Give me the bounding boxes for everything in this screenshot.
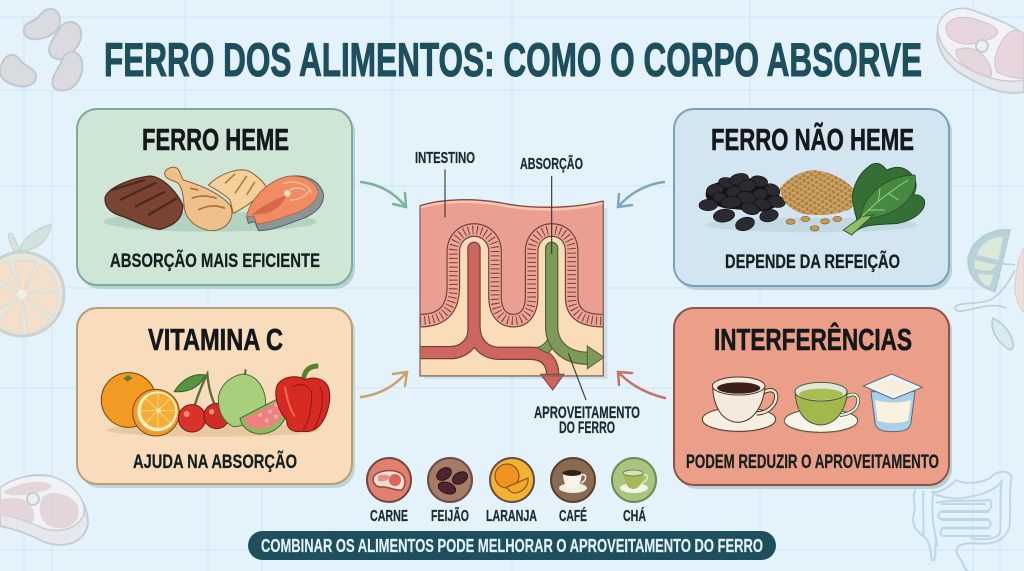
footer banner: COMBINAR OS ALIMENTOS PODE MELHORAR O APROVEITAMENTO DO FERRO bbox=[261, 535, 763, 556]
decoration: intestine bottom right bbox=[913, 472, 1012, 571]
label: absorcao: ABSORÇÃO bbox=[520, 153, 583, 173]
legend: cha bbox=[612, 458, 656, 525]
icon: fruits and pepper bbox=[101, 366, 330, 437]
label: aproveitamento do ferro bbox=[534, 404, 640, 437]
arrow: non heme to intestine bbox=[618, 182, 664, 207]
legend: cafe: CAFÉ bbox=[559, 506, 587, 525]
heading: ferro nao heme: FERRO NÃO HEME bbox=[711, 122, 914, 157]
legend: laranja: LARANJA bbox=[486, 508, 537, 525]
label: intestino: INTESTINO bbox=[415, 150, 475, 167]
legend: feijao bbox=[428, 458, 472, 525]
arrow: vitamin c to intestine bbox=[361, 372, 407, 397]
caption: ferro nao heme: DEPENDE DA REFEIÇÃO bbox=[725, 250, 900, 273]
arrow: heme to intestine bbox=[361, 182, 406, 207]
icon: coffee, tea and yogurt bbox=[702, 374, 922, 434]
legend: cha: CHÁ bbox=[623, 506, 646, 525]
label: aproveitamento do ferro: APROVEITAMENTO bbox=[534, 404, 640, 422]
legend: cafe bbox=[551, 458, 595, 525]
diagram: intestine cross section bbox=[420, 169, 607, 400]
panel: ferro heme bbox=[77, 109, 355, 289]
legend: carne bbox=[367, 458, 411, 525]
vessel: red pathway bbox=[420, 242, 564, 390]
decoration: steak bottom left bbox=[0, 475, 88, 545]
icon: beans, lentils and spinach bbox=[699, 163, 925, 235]
heading: ferro heme: FERRO HEME bbox=[142, 122, 289, 157]
legend: laranja bbox=[486, 458, 537, 525]
heading: vitamina c: VITAMINA C bbox=[148, 322, 283, 357]
arrow: interference to intestine bbox=[618, 372, 665, 398]
decoration: beans top left bbox=[0, 9, 82, 90]
decoration: steak top right bbox=[937, 8, 1024, 93]
panel: interferencias bbox=[674, 308, 952, 489]
panel: vitamina c bbox=[77, 308, 355, 488]
vessel: green pathway bbox=[537, 242, 604, 369]
decoration: orange slice left bbox=[0, 224, 64, 336]
caption: vitamina c: AJUDA NA ABSORÇÃO bbox=[133, 450, 297, 473]
decoration: citrus, stomach and leaf right bbox=[955, 230, 1024, 350]
label: aproveitamento do ferro: DO FERRO bbox=[559, 419, 615, 437]
caption: ferro heme: ABSORÇÃO MAIS EFICIENTE bbox=[110, 249, 320, 272]
legend: carne: CARNE bbox=[370, 508, 408, 525]
panel: ferro nao heme bbox=[674, 109, 952, 290]
heading: interferencias: INTERFERÊNCIAS bbox=[714, 321, 912, 357]
footer banner bbox=[248, 531, 776, 560]
icon: meat, chicken and salmon bbox=[103, 167, 323, 232]
legend: feijao: FEIJÃO bbox=[431, 505, 469, 525]
